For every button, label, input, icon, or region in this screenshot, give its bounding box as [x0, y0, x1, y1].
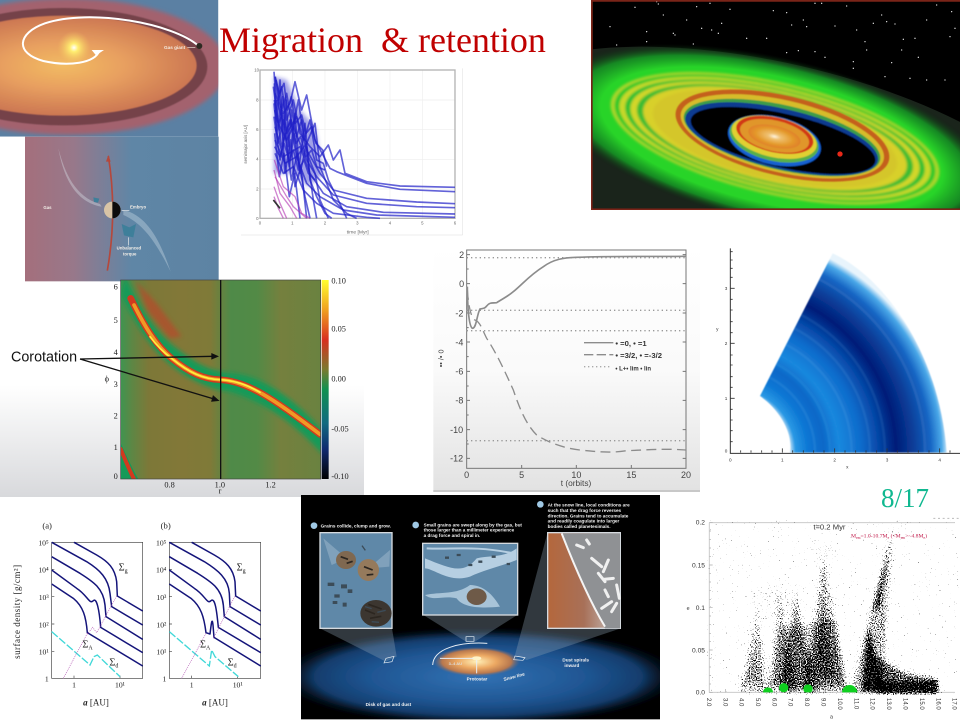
chart: eccentricity scatter plot: (<M — [889, 533, 901, 540]
protoplanets — [763, 683, 858, 692]
chart: semimajor axis versus time: 5 — [421, 221, 424, 226]
protostar glow — [433, 647, 520, 676]
chart: corotation heat map: ϕ — [105, 375, 110, 384]
chart: semimajor axis versus time: 4 — [389, 221, 392, 226]
chart: eccentricity scatter plot: 0.05 — [692, 647, 705, 654]
chart: eccentricity scatter plot — [687, 518, 960, 720]
chart: corotation heat map: 0.10 — [331, 277, 346, 286]
chart: blue density wedge: 1 — [781, 457, 784, 462]
beams from disk to insets — [320, 533, 621, 662]
panel: gas giant disk illustration: Gas giant — [164, 45, 186, 50]
spiral wake — [121, 298, 320, 481]
chart: eccentricity scatter plot: e — [888, 536, 890, 540]
chart: semimajor axis versus time: 0 — [256, 216, 259, 221]
title: Migration & retention — [219, 20, 546, 60]
chart: corotation heat map: 1 — [114, 443, 118, 452]
chart: surface density versus radius: surface density [g/cm²] — [12, 564, 22, 659]
disk of gas and dust — [301, 629, 660, 720]
plot a: d — [115, 663, 118, 669]
panel: unbalanced torque illustration — [25, 137, 219, 281]
chart: corotation heat map: 0.8 — [164, 481, 175, 490]
chart: semimajor axis versus time: 10 — [254, 68, 260, 73]
plot a: Σ — [82, 639, 88, 650]
plot b: 10¹ — [233, 680, 243, 689]
chart: eccentricity scatter plot: em — [901, 536, 905, 540]
chart: corotation heat map: -0.10 — [331, 472, 349, 481]
step captions: Disk of gas and dust — [366, 702, 412, 707]
step captions: a drag force and spiral in. — [424, 533, 480, 538]
chart: blue density wedge: 2 — [833, 457, 836, 462]
plot a: A — [88, 645, 93, 651]
chart: torque versus time: 5 — [519, 470, 524, 480]
chart: eccentricity scatter plot: M — [851, 534, 856, 540]
step captions — [311, 501, 630, 707]
chart: eccentricity scatter plot: 14.0 — [901, 698, 907, 710]
chart: semimajor axis versus time: time [Myr] — [347, 229, 369, 235]
plot a: Σ — [109, 657, 115, 668]
chart: corotation heat map: -0.05 — [331, 425, 349, 434]
chart: blue density wedge: y — [716, 327, 719, 332]
plot a: 10¹ — [115, 680, 126, 689]
chart: eccentricity scatter plot: 0.1 — [696, 605, 705, 612]
chart: semimajor axis versus time: 6 — [454, 221, 457, 226]
chart: eccentricity scatter plot: e — [924, 536, 926, 540]
chart: eccentricity scatter plot: ) — [925, 533, 927, 540]
chart: blue density wedge: 0 — [729, 457, 732, 462]
chart: eccentricity scatter plot: 4.0 — [738, 698, 744, 707]
chart: blue density wedge: 1 — [725, 396, 728, 401]
plot b: 10² — [156, 620, 167, 629]
plot b: 10¹ — [156, 648, 167, 657]
panel: unbalanced torque illustration: Unbalanced — [117, 245, 142, 250]
chart: blue density wedge: 3 — [886, 457, 889, 462]
chart: blue density wedge: 4 — [938, 457, 941, 462]
panel: unbalanced torque illustration: torque — [123, 251, 137, 256]
chart: corotation heat map: 0.05 — [331, 325, 346, 334]
chart: eccentricity scatter plot: 0.0 — [696, 689, 705, 696]
chart: torque versus time: 0 — [459, 279, 464, 289]
step captions: At the snow line, local conditions are — [548, 503, 630, 508]
plot a: a [AU] — [83, 697, 109, 707]
plot b: 1 — [190, 680, 194, 689]
chart: eccentricity scatter plot: 13.0 — [885, 698, 891, 710]
plot a: 10⁴ — [38, 566, 49, 575]
chart: torque versus time: • =3/2, • =-3/2 — [615, 351, 662, 360]
chart: eccentricity scatter plot: t=0.2 Myr — [813, 522, 846, 531]
panel: green protoplanetary disk simulation — [591, 0, 960, 210]
chart: semimajor axis versus time: semimajor axis [AU] — [243, 125, 248, 164]
chart: corotation heat map: 1.2 — [265, 481, 276, 490]
heat map backdrop — [0, 385, 364, 497]
chart: eccentricity scatter plot: e — [687, 606, 690, 612]
chart: eccentricity scatter plot: em — [856, 536, 861, 540]
page number: 8/17 — [881, 483, 929, 513]
chart: torque versus time: -8 — [455, 396, 463, 406]
plot b: Σ — [228, 657, 234, 668]
plot b: a [AU] — [202, 697, 228, 707]
chart: torque versus time — [433, 247, 700, 492]
chart: torque versus time: 15 — [626, 470, 636, 480]
chart: eccentricity scatter plot: 10.0 — [836, 698, 842, 710]
chart: torque versus time: -2 — [455, 308, 463, 318]
chart: torque versus time: • L+• lim • lin — [615, 367, 651, 373]
plot b: Σ — [200, 639, 206, 650]
step captions: and readily coagulate into larger — [548, 519, 620, 524]
chart: eccentricity scatter plot: 12.0 — [869, 698, 875, 710]
panel: unbalanced torque illustration: Gas — [43, 205, 52, 210]
plot a: 1 — [72, 680, 76, 689]
chart: corotation heat map: 6 — [114, 283, 118, 292]
chart: surface density versus radius — [12, 521, 261, 707]
step captions: such that the drag force reverses — [548, 508, 622, 513]
chart: eccentricity scatter plot: 17.0 — [951, 698, 957, 710]
chart: eccentricity scatter plot: 2.0 — [705, 698, 711, 707]
chart: eccentricity scatter plot: 9.0 — [820, 698, 826, 707]
plot b: g — [243, 569, 246, 575]
chart: semimajor axis versus time: 0 — [259, 221, 262, 226]
inset 2 — [423, 543, 518, 615]
chart: corotation heat map: 2 — [114, 411, 118, 420]
chart: eccentricity scatter plot: 0.15 — [692, 562, 705, 569]
chart: corotation heat map: r — [219, 487, 222, 496]
plot b: 1 — [163, 674, 167, 683]
chart: torque versus time: -12 — [450, 454, 463, 464]
chart: eccentricity scatter plot: 0.2 — [696, 520, 705, 527]
chart: blue density wedge: 3 — [725, 286, 728, 291]
inset 1 — [320, 533, 392, 628]
chart: torque versus time: -10 — [450, 425, 463, 435]
plot a: 10¹ — [39, 648, 49, 657]
chart: torque versus time: 20 — [681, 470, 691, 480]
plot b: 10⁴ — [156, 566, 167, 575]
chart: blue density wedge: x — [846, 465, 849, 470]
scatter cloud — [739, 525, 938, 694]
plot b: 10⁵ — [156, 539, 167, 548]
star field — [610, 2, 955, 80]
chart: eccentricity scatter plot: 16.0 — [934, 698, 940, 710]
chart: torque versus time: 2 — [459, 250, 464, 260]
plot a: 10³ — [39, 593, 49, 602]
chart: corotation heat map: 1.0 — [215, 481, 225, 490]
chart: semimajor axis versus time: 8 — [256, 97, 259, 102]
step captions: direction. Grains tend to accumulate — [548, 513, 629, 518]
step captions: those larger than a millimeter experience — [424, 528, 515, 533]
chart: corotation heat map: 5 — [114, 316, 118, 325]
plot b — [156, 539, 261, 707]
plot b: d — [234, 663, 237, 669]
panel: planetesimal formation in a dust disk — [301, 495, 660, 720]
plot a: Σ — [119, 563, 125, 574]
chart: eccentricity scatter plot: 8.0 — [803, 698, 809, 707]
chart: torque versus time: 0 — [464, 470, 469, 480]
chart: torque versus time: 10 — [571, 470, 581, 480]
step captions: Snow line — [503, 671, 526, 682]
plot b: A — [206, 645, 211, 651]
chart: blue density wedge: 0 — [725, 448, 728, 453]
chart: corotation heat map — [11, 275, 349, 496]
chart: semimajor axis versus time: 3 — [356, 221, 359, 226]
chart: eccentricity scatter plot: 3.0 — [721, 698, 727, 707]
colour bar — [322, 280, 329, 479]
chart: eccentricity scatter plot: 15.0 — [918, 698, 924, 710]
chart: eccentricity scatter plot: >~4.8M — [905, 534, 924, 540]
chart: surface density versus radius: (a) — [42, 521, 52, 531]
chart: semimajor axis versus time: 1 — [291, 221, 294, 226]
chart: corotation heat map: 0.00 — [331, 375, 346, 384]
chart: corotation heat map: 4 — [114, 348, 119, 357]
plot a: 1 — [45, 674, 49, 683]
chart: semimajor axis versus time — [241, 68, 463, 235]
step captions: Small grains are swept along by the gas, but — [424, 522, 522, 527]
plot a: 10² — [39, 620, 49, 629]
arrows to corotation points — [80, 354, 218, 401]
step captions: Dust spirals — [562, 658, 589, 663]
plot b: 10³ — [156, 593, 167, 602]
inset 3 — [548, 533, 620, 628]
chart: eccentricity scatter plot: 5.0 — [754, 698, 760, 707]
red lobe upper left — [135, 280, 182, 338]
chart: torque versus time: t (orbits) — [561, 478, 591, 488]
plot a: 10⁵ — [38, 539, 49, 548]
chart: semimajor axis versus time: 2 — [256, 186, 259, 191]
chart: semimajor axis versus time: 2 — [324, 221, 327, 226]
step captions: Protostar — [467, 676, 488, 681]
chart: eccentricity scatter plot: 6.0 — [770, 698, 776, 707]
chart: blue density wedge — [716, 248, 960, 468]
chart: semimajor axis versus time: 4 — [256, 157, 259, 162]
step captions: bodies called planetesimals. — [548, 524, 611, 529]
step captions: Grains collide, clump and grow. — [321, 523, 391, 528]
label: Corotation: Corotation — [11, 350, 77, 366]
plot a — [38, 539, 143, 707]
step captions: inward — [564, 663, 579, 668]
chart: corotation heat map: 0 — [114, 472, 118, 481]
chart: eccentricity scatter plot: 7.0 — [787, 698, 793, 707]
plot a: g — [125, 569, 128, 575]
panel: unbalanced torque illustration: Embryo — [130, 205, 146, 210]
chart: semimajor axis versus time: 6 — [256, 127, 259, 132]
chart: surface density versus radius: (b) — [161, 521, 171, 531]
panel: gas giant disk illustration — [0, 0, 227, 137]
step captions: 3–4 AU — [449, 661, 462, 666]
chart: blue density wedge: 2 — [725, 341, 728, 346]
chart: torque versus time: -6 — [455, 367, 463, 377]
chart: torque versus time: • =0, • =1 — [615, 339, 647, 348]
chart: eccentricity scatter plot: =1.0-10.7M — [860, 534, 888, 540]
plot b: Σ — [237, 563, 243, 574]
chart: corotation heat map: 3 — [114, 380, 118, 389]
chart: eccentricity scatter plot: 11.0 — [852, 698, 858, 710]
chart: torque versus time: -4 — [455, 337, 463, 347]
chart: torque versus time: •• /• 0 — [436, 349, 445, 367]
